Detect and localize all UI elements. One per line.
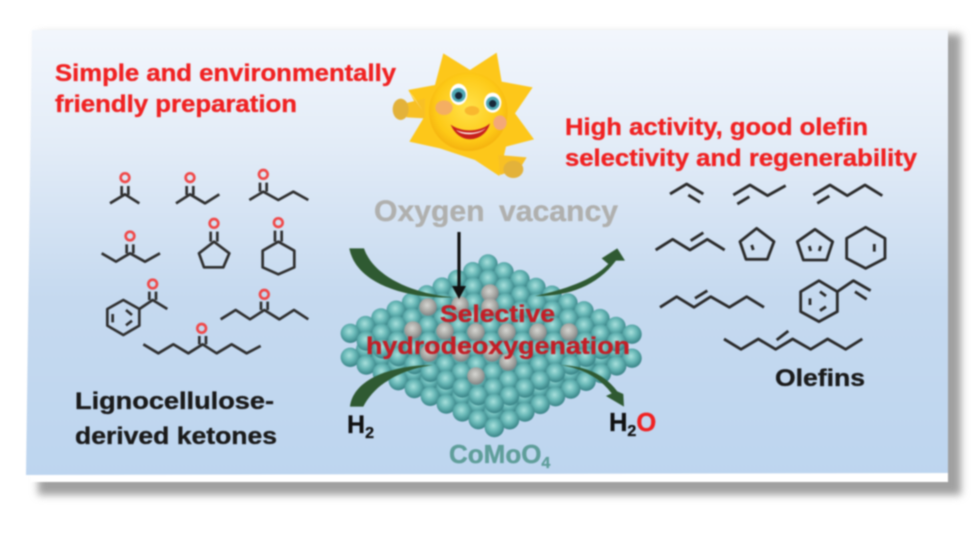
label: oxygen vacancy: Oxygen vacancy: [374, 195, 619, 228]
cyclopentene: [740, 228, 774, 259]
label: H2O: O: [636, 409, 656, 437]
arrow: bottom left: [350, 365, 433, 407]
label: H2: H: [347, 411, 365, 439]
propene: [670, 184, 703, 202]
label: H2: 2: [365, 425, 374, 442]
pentene: [813, 185, 882, 203]
heading: simple preparation: [55, 60, 396, 118]
4-nonene: [724, 331, 862, 349]
3-heptene: [660, 291, 764, 307]
panel bevel: [30, 30, 948, 482]
heading: high activity: High activity, good olefin: [565, 114, 868, 141]
olefin structures: [656, 184, 885, 349]
5-nonanone: [143, 324, 261, 353]
background panel: [26, 30, 948, 475]
arrow: top right: [535, 248, 625, 296]
cyclohexene: [847, 227, 885, 268]
catalyst: CoMoO4 sphere lattice: [341, 254, 642, 437]
label: lignocellulose-derived ketones: Lignocellulose-: [75, 388, 274, 415]
label: selective hydrodeoxygenation: hydrodeoxygenation: [366, 333, 630, 360]
styrene: [801, 281, 871, 322]
label: H2O: H: [609, 409, 627, 437]
label: olefins: Olefins: [775, 365, 865, 392]
butene: [733, 185, 786, 204]
acetophenone: [107, 280, 167, 335]
2-pentanone: [249, 170, 308, 200]
label: selective hydrodeoxygenation: Selective: [440, 301, 555, 328]
label: selective hydrodeoxygenation: [366, 301, 630, 360]
arrow: bottom right: [560, 365, 624, 407]
label: lignocellulose-derived ketones: derived ketones: [75, 423, 277, 450]
arrow: top left: [349, 248, 454, 298]
label: H2O: 2: [627, 423, 636, 440]
label: lignocellulose-derived ketones: [75, 388, 277, 450]
2-pentene: [656, 233, 725, 250]
butanone: [176, 173, 219, 203]
heading: high activity: selectivity and regenerability: [565, 145, 917, 172]
heading: high activity: [565, 114, 917, 172]
ketone structures: [102, 170, 308, 353]
label: CoMoO4: 4: [541, 455, 550, 472]
icon: smiling sun: [393, 53, 534, 178]
heading: simple preparation: Simple and environmentally: [55, 60, 396, 87]
3-pentanone: [102, 232, 160, 262]
cyclopentanone: [199, 219, 229, 267]
cyclopentadiene: [797, 229, 833, 260]
acetone: [110, 173, 139, 203]
4-heptanone: [221, 290, 308, 319]
label: CoMoO4: CoMoO: [449, 439, 541, 469]
green reaction arrows: [349, 248, 625, 407]
cyclohexanone: [263, 218, 294, 274]
heading: simple preparation: friendly preparation: [55, 91, 297, 118]
arrow: oxygen vacancy pointer: [452, 232, 466, 299]
